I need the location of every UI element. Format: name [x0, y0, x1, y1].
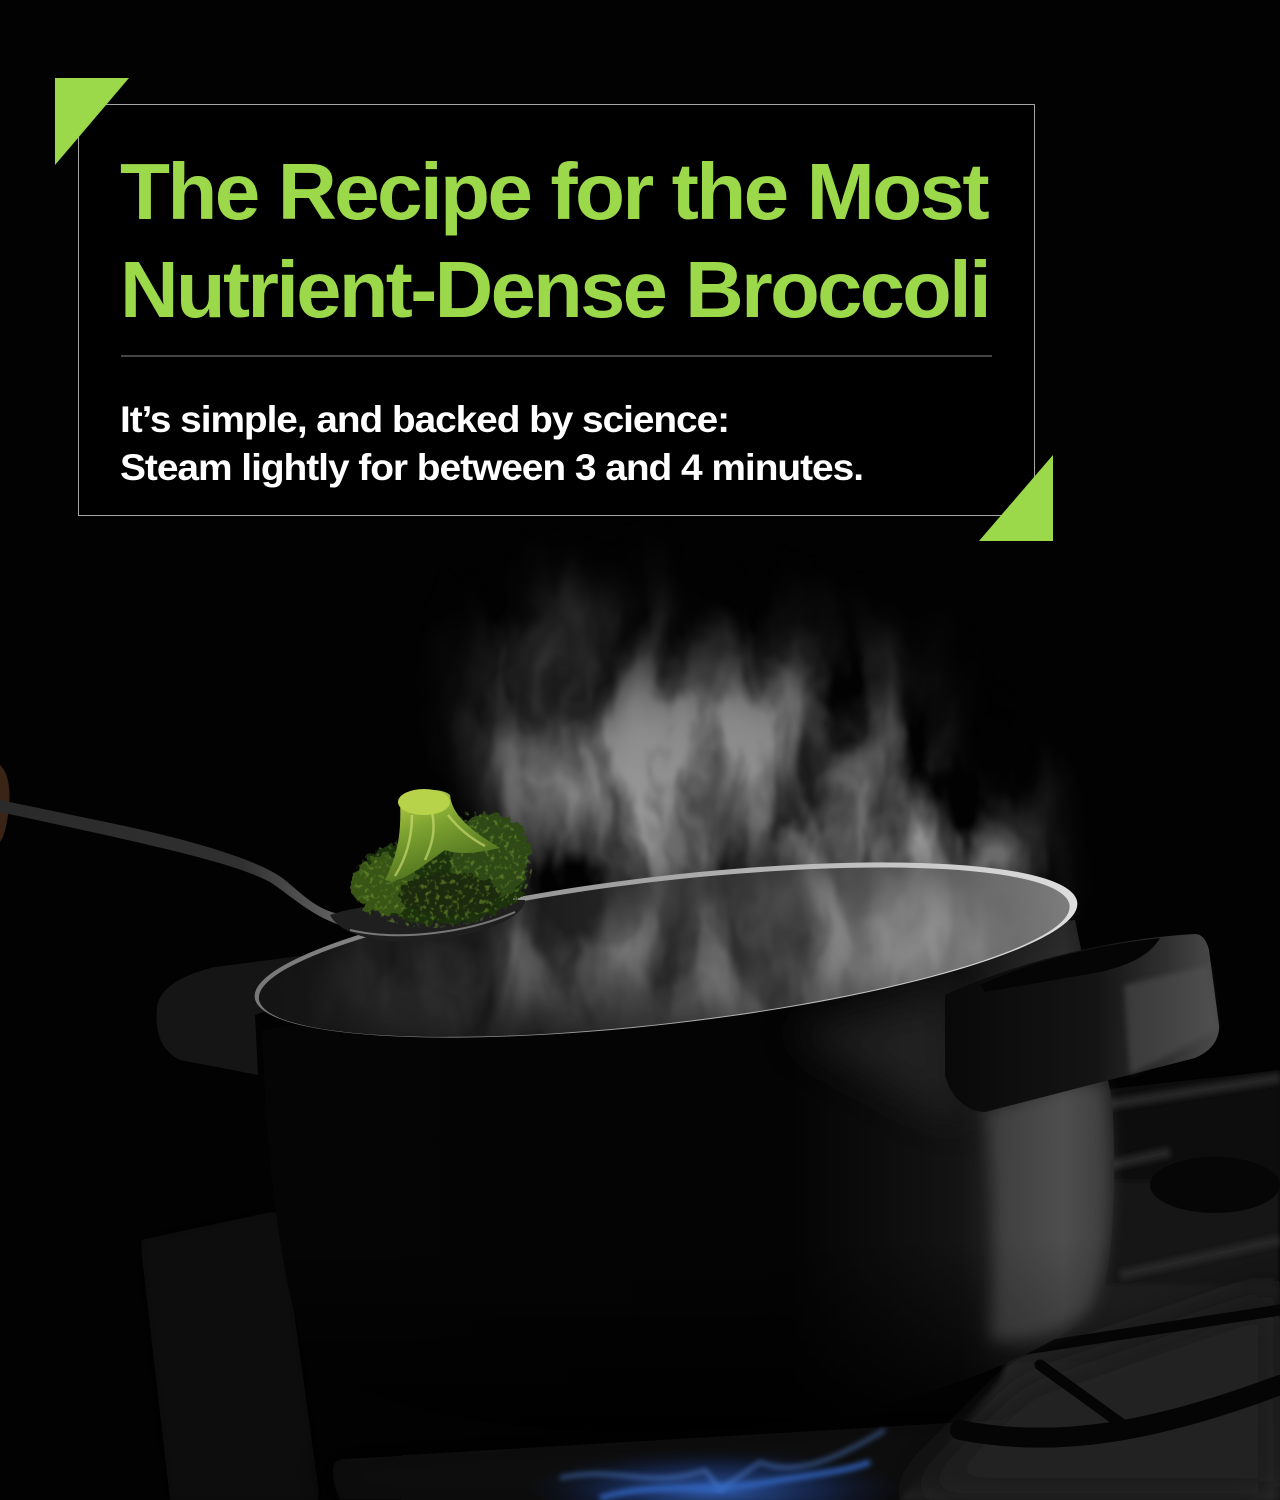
left handle	[157, 956, 300, 1075]
subtitle: Steam lightly for between 3 and 4 minutes.	[120, 447, 863, 488]
corner triangle bottom right	[979, 455, 1053, 541]
hand at left edge	[0, 765, 10, 842]
burner grate	[960, 1310, 1280, 1438]
corner triangle top left	[55, 78, 129, 165]
pot body	[262, 920, 1114, 1432]
pot rim and interior	[246, 829, 1086, 1071]
pot highlight	[985, 1084, 1111, 1341]
spoon with handle	[0, 800, 525, 942]
title: The Recipe for the Most	[120, 147, 989, 236]
steam above pot	[462, 587, 1051, 920]
broccoli floret	[345, 789, 535, 930]
title	[120, 147, 989, 334]
flame	[525, 1430, 905, 1500]
title: Nutrient-Dense Broccoli	[120, 245, 989, 334]
steam inside pot	[330, 880, 1020, 1020]
title box frame	[78, 104, 1034, 516]
subtitle	[120, 399, 863, 488]
stove top	[140, 1070, 1280, 1500]
right handle	[945, 934, 1219, 1112]
subtitle: It’s simple, and backed by science:	[120, 399, 729, 440]
